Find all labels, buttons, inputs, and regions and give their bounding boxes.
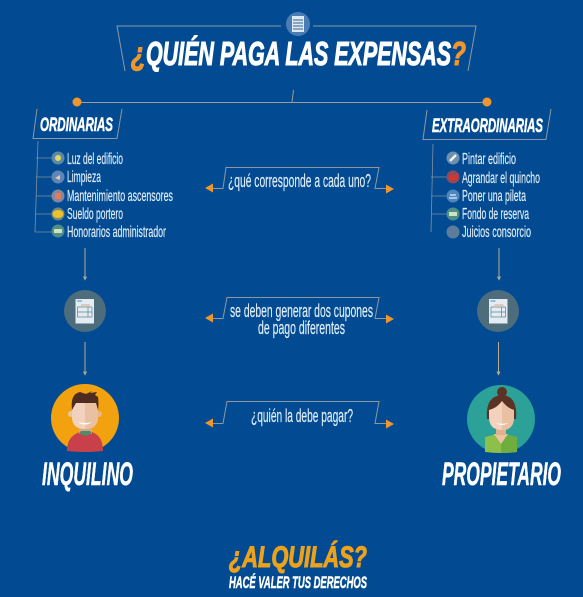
item: luz del edificio: Luz del edificio <box>67 151 123 168</box>
callout: que corresponde: ¿qué corresponde a cada uno? <box>228 171 371 191</box>
list connector lines <box>35 141 52 232</box>
arrow: ordinarias to coupon <box>84 248 86 280</box>
item: limpieza: Limpieza <box>67 169 101 186</box>
title frame <box>117 26 476 71</box>
title: ¿ <box>131 35 146 72</box>
icon: coupon left <box>64 290 106 332</box>
arrow: coupon to propietario <box>497 342 500 374</box>
item: juicios consorcio: Juicios consorcio <box>462 224 531 241</box>
callout: dos cupones: de pago diferentes <box>258 318 345 338</box>
title icon <box>286 12 310 36</box>
arrow: coupon to inquilino <box>84 342 86 374</box>
panel: extraordinarias <box>423 109 551 241</box>
footer: alquilas: ¿ALQUILÁS? <box>229 540 367 574</box>
title: ? <box>451 35 466 72</box>
icon: inquilino avatar <box>51 384 119 452</box>
footer: hace valer tus derechos: HACÉ VALER TUS DERECHOS <box>229 573 367 592</box>
item: sueldo portero: Sueldo portero <box>67 206 123 223</box>
item: mantenimiento ascensores: Mantenimiento ascensores <box>67 188 173 205</box>
connector: top branch line <box>72 90 492 106</box>
item: honorarios administrador: Honorarios administrador <box>67 224 166 241</box>
arrow: extraordinarias to coupon <box>498 248 500 280</box>
icon: propietario avatar <box>467 385 535 453</box>
list connector lines <box>431 144 447 232</box>
item: pintar edificio: Pintar edificio <box>462 151 516 168</box>
icon: coupon right <box>477 290 519 332</box>
callout: dos cupones <box>205 298 394 338</box>
callout: quien la debe pagar: ¿quién la debe pagar? <box>251 406 353 426</box>
panel: ordinarias <box>33 109 173 241</box>
heading: ordinarias: ORDINARIAS <box>40 115 113 136</box>
callout: que corresponde <box>205 168 394 194</box>
callout: quien la debe pagar <box>205 402 394 428</box>
item: poner una pileta: Poner una pileta <box>462 188 526 205</box>
callout: dos cupones: se deben generar dos cupones <box>230 301 373 321</box>
label: inquilino: INQUILINO <box>42 456 133 492</box>
